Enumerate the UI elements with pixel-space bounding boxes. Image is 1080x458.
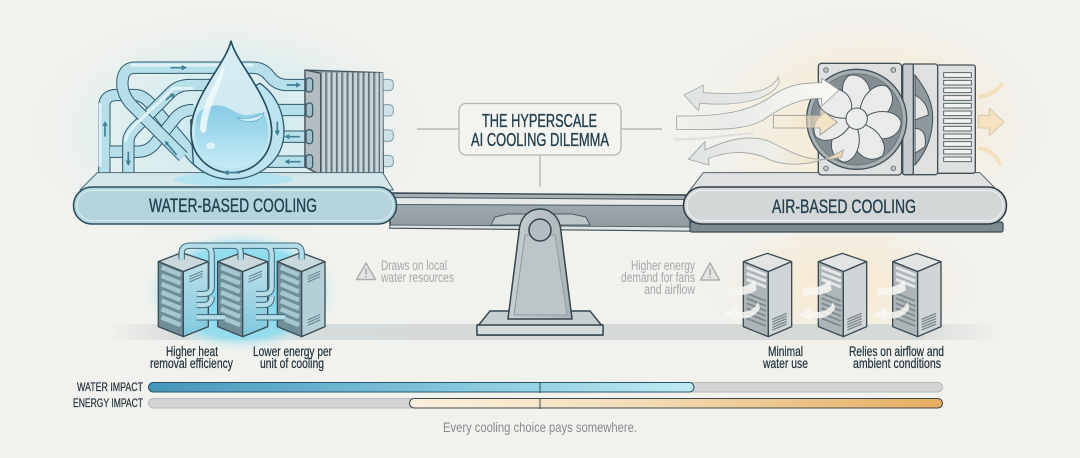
radiator stubs: [381, 79, 393, 167]
radiator block: [937, 65, 975, 173]
pipe feet: [97, 175, 137, 182]
rear fan: [903, 64, 938, 175]
flow arrows: [102, 65, 301, 175]
glow: air racks: [697, 207, 987, 363]
water-cooled racks: [143, 230, 340, 353]
icon: warning triangle: [700, 263, 720, 280]
title box: THE HYPERSCALE: [482, 110, 597, 131]
note: energy demand: demand for fans: [621, 270, 695, 285]
label: heat removal: [150, 344, 233, 371]
label: heat removal: Higher heat: [166, 344, 218, 359]
water drop: [191, 41, 272, 173]
label: energy per unit: [253, 344, 332, 371]
rack A: [743, 253, 792, 337]
note: energy demand: [621, 258, 720, 297]
front fan: [807, 63, 907, 175]
water impact bar: [77, 380, 942, 394]
cyan glow: [143, 230, 340, 353]
air-based cooling platform: [684, 187, 1006, 224]
pipe connectors: [306, 78, 313, 169]
note: water resources: Draws on local: [381, 258, 447, 273]
air cooling illustration: [673, 63, 1004, 197]
fulcrum base: [477, 311, 603, 335]
beam: [390, 193, 1003, 232]
rack pipes: [182, 246, 302, 317]
water cooling illustration: [80, 41, 393, 190]
label: heat removal: removal efficiency: [150, 356, 233, 371]
air-cooled racks: [723, 253, 941, 337]
note: water resources: water resources: [380, 270, 454, 285]
fan blades: [810, 75, 903, 165]
label: airflow reliance: Relies on airflow and: [849, 344, 944, 359]
label: energy per unit: Lower energy per: [253, 344, 332, 359]
fulcrum post: [508, 209, 572, 319]
water platform top: [80, 173, 393, 190]
closing caption: Every cooling choice pays somewhere.: [443, 420, 637, 435]
glow under drop: [173, 173, 293, 186]
label: minimal water: [762, 344, 808, 371]
radiator: [305, 70, 383, 175]
rack 1: [158, 253, 208, 337]
label: airflow reliance: ambient conditions: [853, 356, 941, 371]
energy impact bar: ENERGY IMPACT: [73, 396, 143, 410]
title box: [459, 104, 621, 155]
note: energy demand: Higher energy: [631, 258, 695, 273]
label: minimal water: Minimal: [768, 344, 803, 359]
title connector lines: [417, 129, 662, 187]
fan hub: [846, 108, 867, 129]
icon: warning triangle: [356, 263, 376, 280]
rack 2: [218, 253, 268, 337]
ground band: [110, 324, 1000, 340]
glow: air side: [680, 0, 1060, 250]
balance scale: [390, 129, 1003, 335]
label: minimal water: water use: [762, 356, 808, 371]
rack 3: [277, 253, 325, 337]
glow: water side: [23, 5, 433, 255]
water-based cooling platform: WATER-BASED COOLING: [149, 195, 317, 217]
air platform top: [685, 173, 1003, 197]
rack C: [893, 253, 941, 337]
rack airflow arrows: [723, 280, 909, 322]
water pipes: [100, 65, 308, 177]
airflow arrows: [673, 77, 843, 165]
air-based cooling platform: AIR-BASED COOLING: [772, 196, 916, 218]
note: energy demand: and airflow: [644, 282, 695, 297]
water ring: [191, 83, 284, 179]
heat exhaust: [978, 83, 1004, 165]
title box: AI COOLING DILEMMA: [471, 129, 609, 150]
water impact bar: WATER IMPACT: [77, 380, 143, 394]
water-based cooling platform: [74, 187, 396, 224]
label: airflow reliance: [849, 344, 944, 371]
note: water resources: [356, 258, 454, 285]
energy impact bar: [73, 396, 942, 410]
rack B: [818, 253, 867, 337]
label: energy per unit: unit of cooling: [260, 356, 324, 371]
